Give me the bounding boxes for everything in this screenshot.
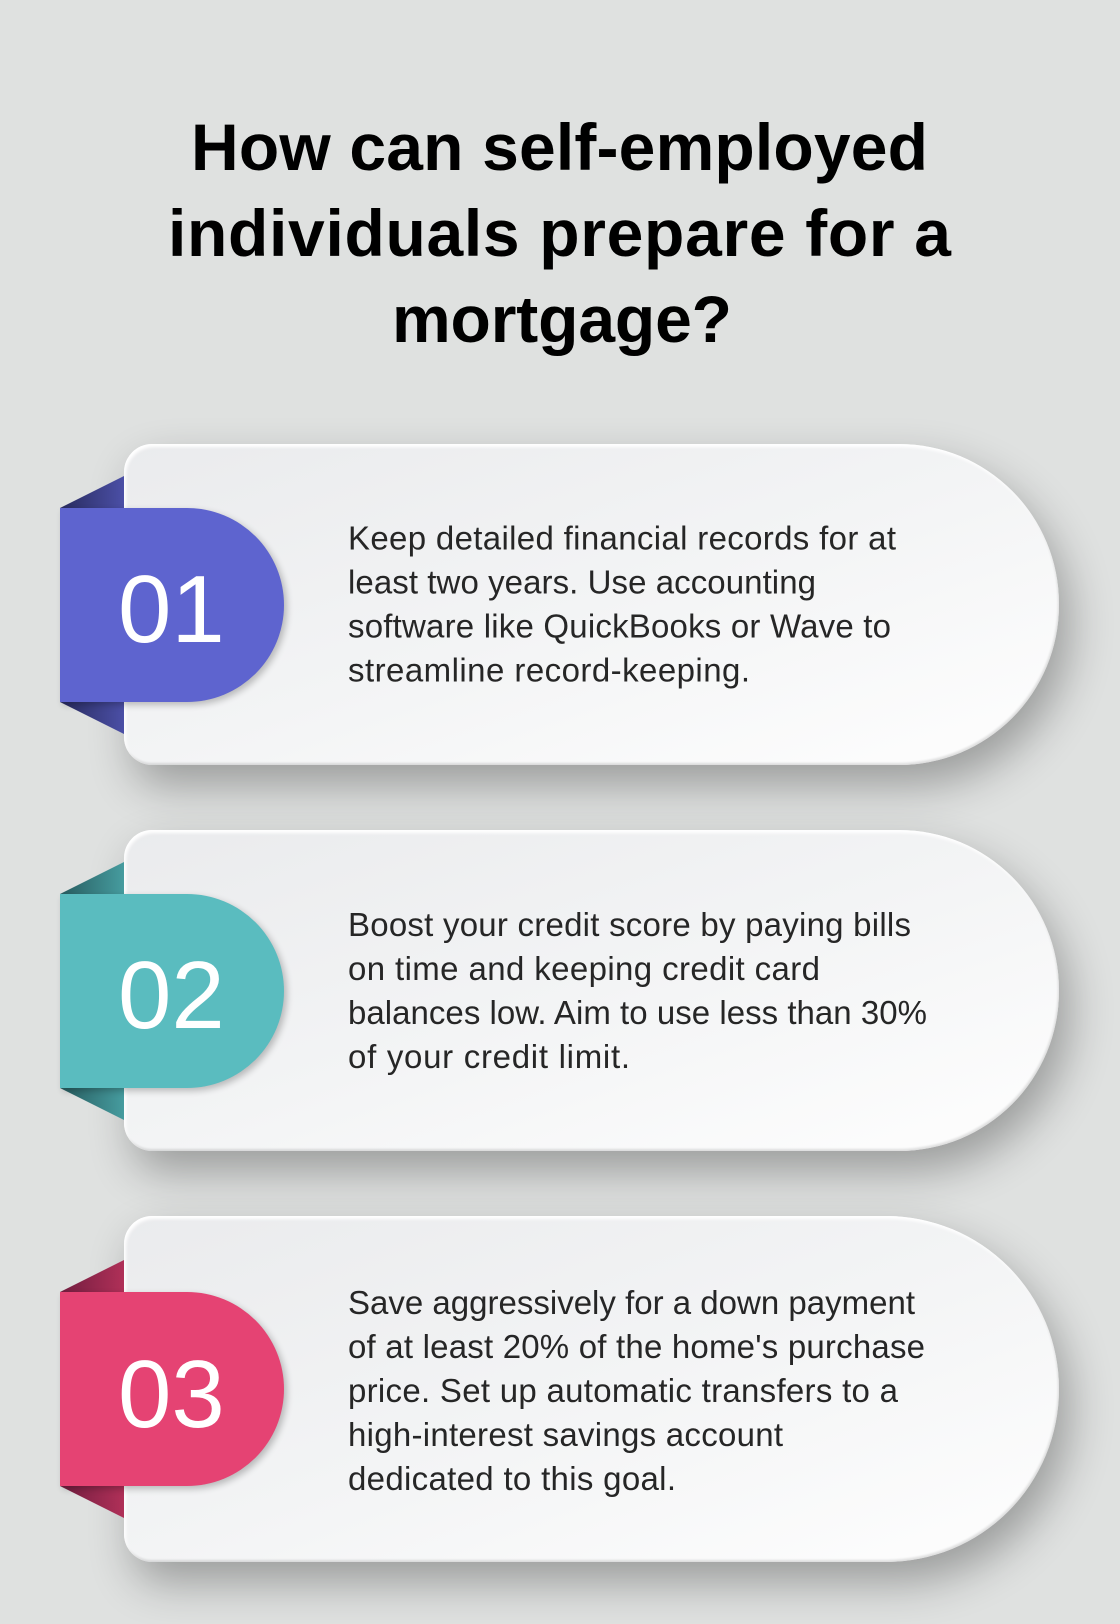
ribbon folds xyxy=(60,1260,124,1518)
panel: step 02 xyxy=(60,826,1092,1196)
title: mortgage? xyxy=(392,282,732,356)
body text: of at least 20% of the home's purchase xyxy=(348,1328,925,1365)
panel: step 01 xyxy=(60,440,1092,810)
number badge xyxy=(60,1292,284,1486)
body text xyxy=(348,519,896,688)
body text: software like QuickBooks or Wave to xyxy=(348,607,891,644)
body text: dedicated to this goal. xyxy=(348,1460,676,1497)
number: 01 xyxy=(118,556,225,663)
number badge xyxy=(60,894,284,1088)
body text: streamline record-keeping. xyxy=(348,651,750,688)
body text: on time and keeping credit card xyxy=(348,950,820,987)
body text: least two years. Use accounting xyxy=(348,563,816,600)
title xyxy=(168,110,952,356)
ribbon folds xyxy=(60,476,124,734)
body text: price. Set up automatic transfers to a xyxy=(348,1372,899,1409)
body text xyxy=(348,1284,925,1497)
body text: Save aggressively for a down payment xyxy=(348,1284,915,1321)
card background xyxy=(124,444,1059,765)
ribbon folds xyxy=(60,862,124,1120)
card background xyxy=(124,830,1059,1151)
number: 02 xyxy=(118,942,225,1049)
title: How can self-employed xyxy=(191,110,928,184)
number: 03 xyxy=(118,1341,225,1448)
title: individuals prepare for a xyxy=(168,196,952,270)
body text: high-interest savings account xyxy=(348,1416,783,1453)
body text: Boost your credit score by paying bills xyxy=(348,906,911,943)
body text: Keep detailed financial records for at xyxy=(348,519,896,556)
body text: balances low. Aim to use less than 30% xyxy=(348,994,927,1031)
card background xyxy=(124,1216,1059,1562)
panel: step 03 xyxy=(60,1212,1092,1606)
number badge xyxy=(60,508,284,702)
body text: of your credit limit. xyxy=(348,1038,630,1075)
body text xyxy=(348,906,927,1075)
